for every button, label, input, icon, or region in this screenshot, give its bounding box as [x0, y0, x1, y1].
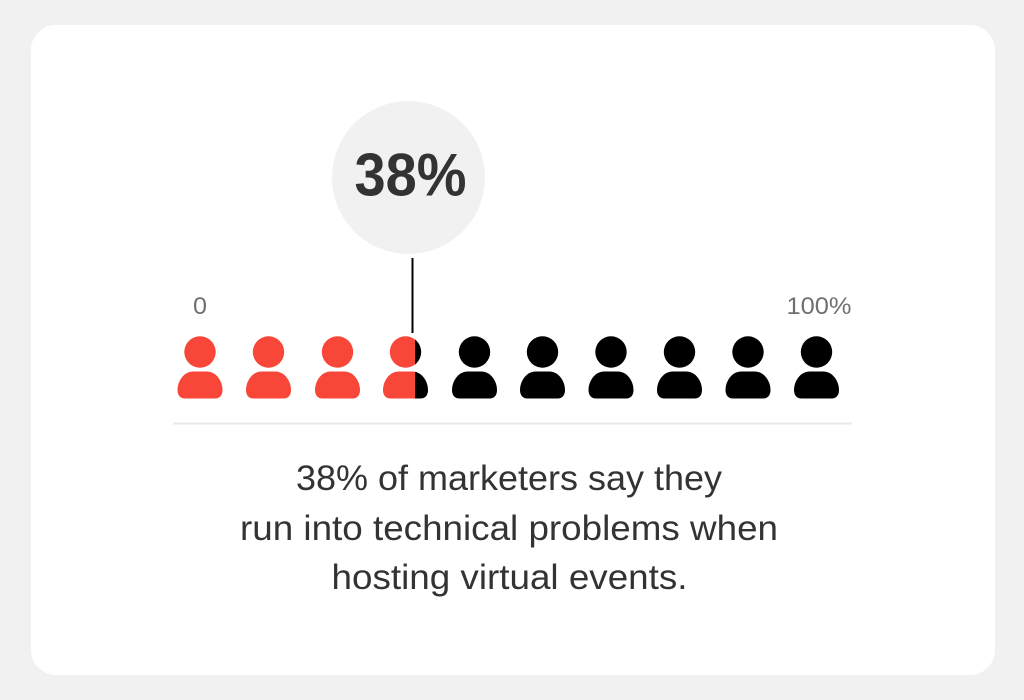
icon: person 8: [657, 336, 702, 398]
icon: person 1: [178, 336, 222, 398]
icon: person 4 partially highlighted: [383, 336, 428, 398]
label: scale end: 100%: [786, 293, 852, 320]
label: scale start: 0: [193, 293, 207, 320]
text block: description: 38% of marketers say they: [296, 459, 723, 498]
pictogram: ten people, 38% highlighted: [178, 336, 839, 398]
text block: description: run into technical problems when: [240, 509, 778, 548]
icon: person 3: [315, 336, 360, 398]
icon: person 6: [520, 336, 565, 398]
icon: person 7: [588, 336, 634, 398]
text block: description: hosting virtual events.: [332, 558, 688, 597]
callout: percentage bubble: 38%: [354, 142, 466, 208]
icon: person 10: [794, 336, 839, 398]
text block: description: [240, 459, 778, 597]
icon: person 2: [246, 336, 291, 398]
callout line: [412, 258, 414, 333]
icon: person 9: [726, 336, 770, 398]
callout: percentage bubble: [332, 101, 485, 254]
icon: person 5: [452, 336, 497, 398]
